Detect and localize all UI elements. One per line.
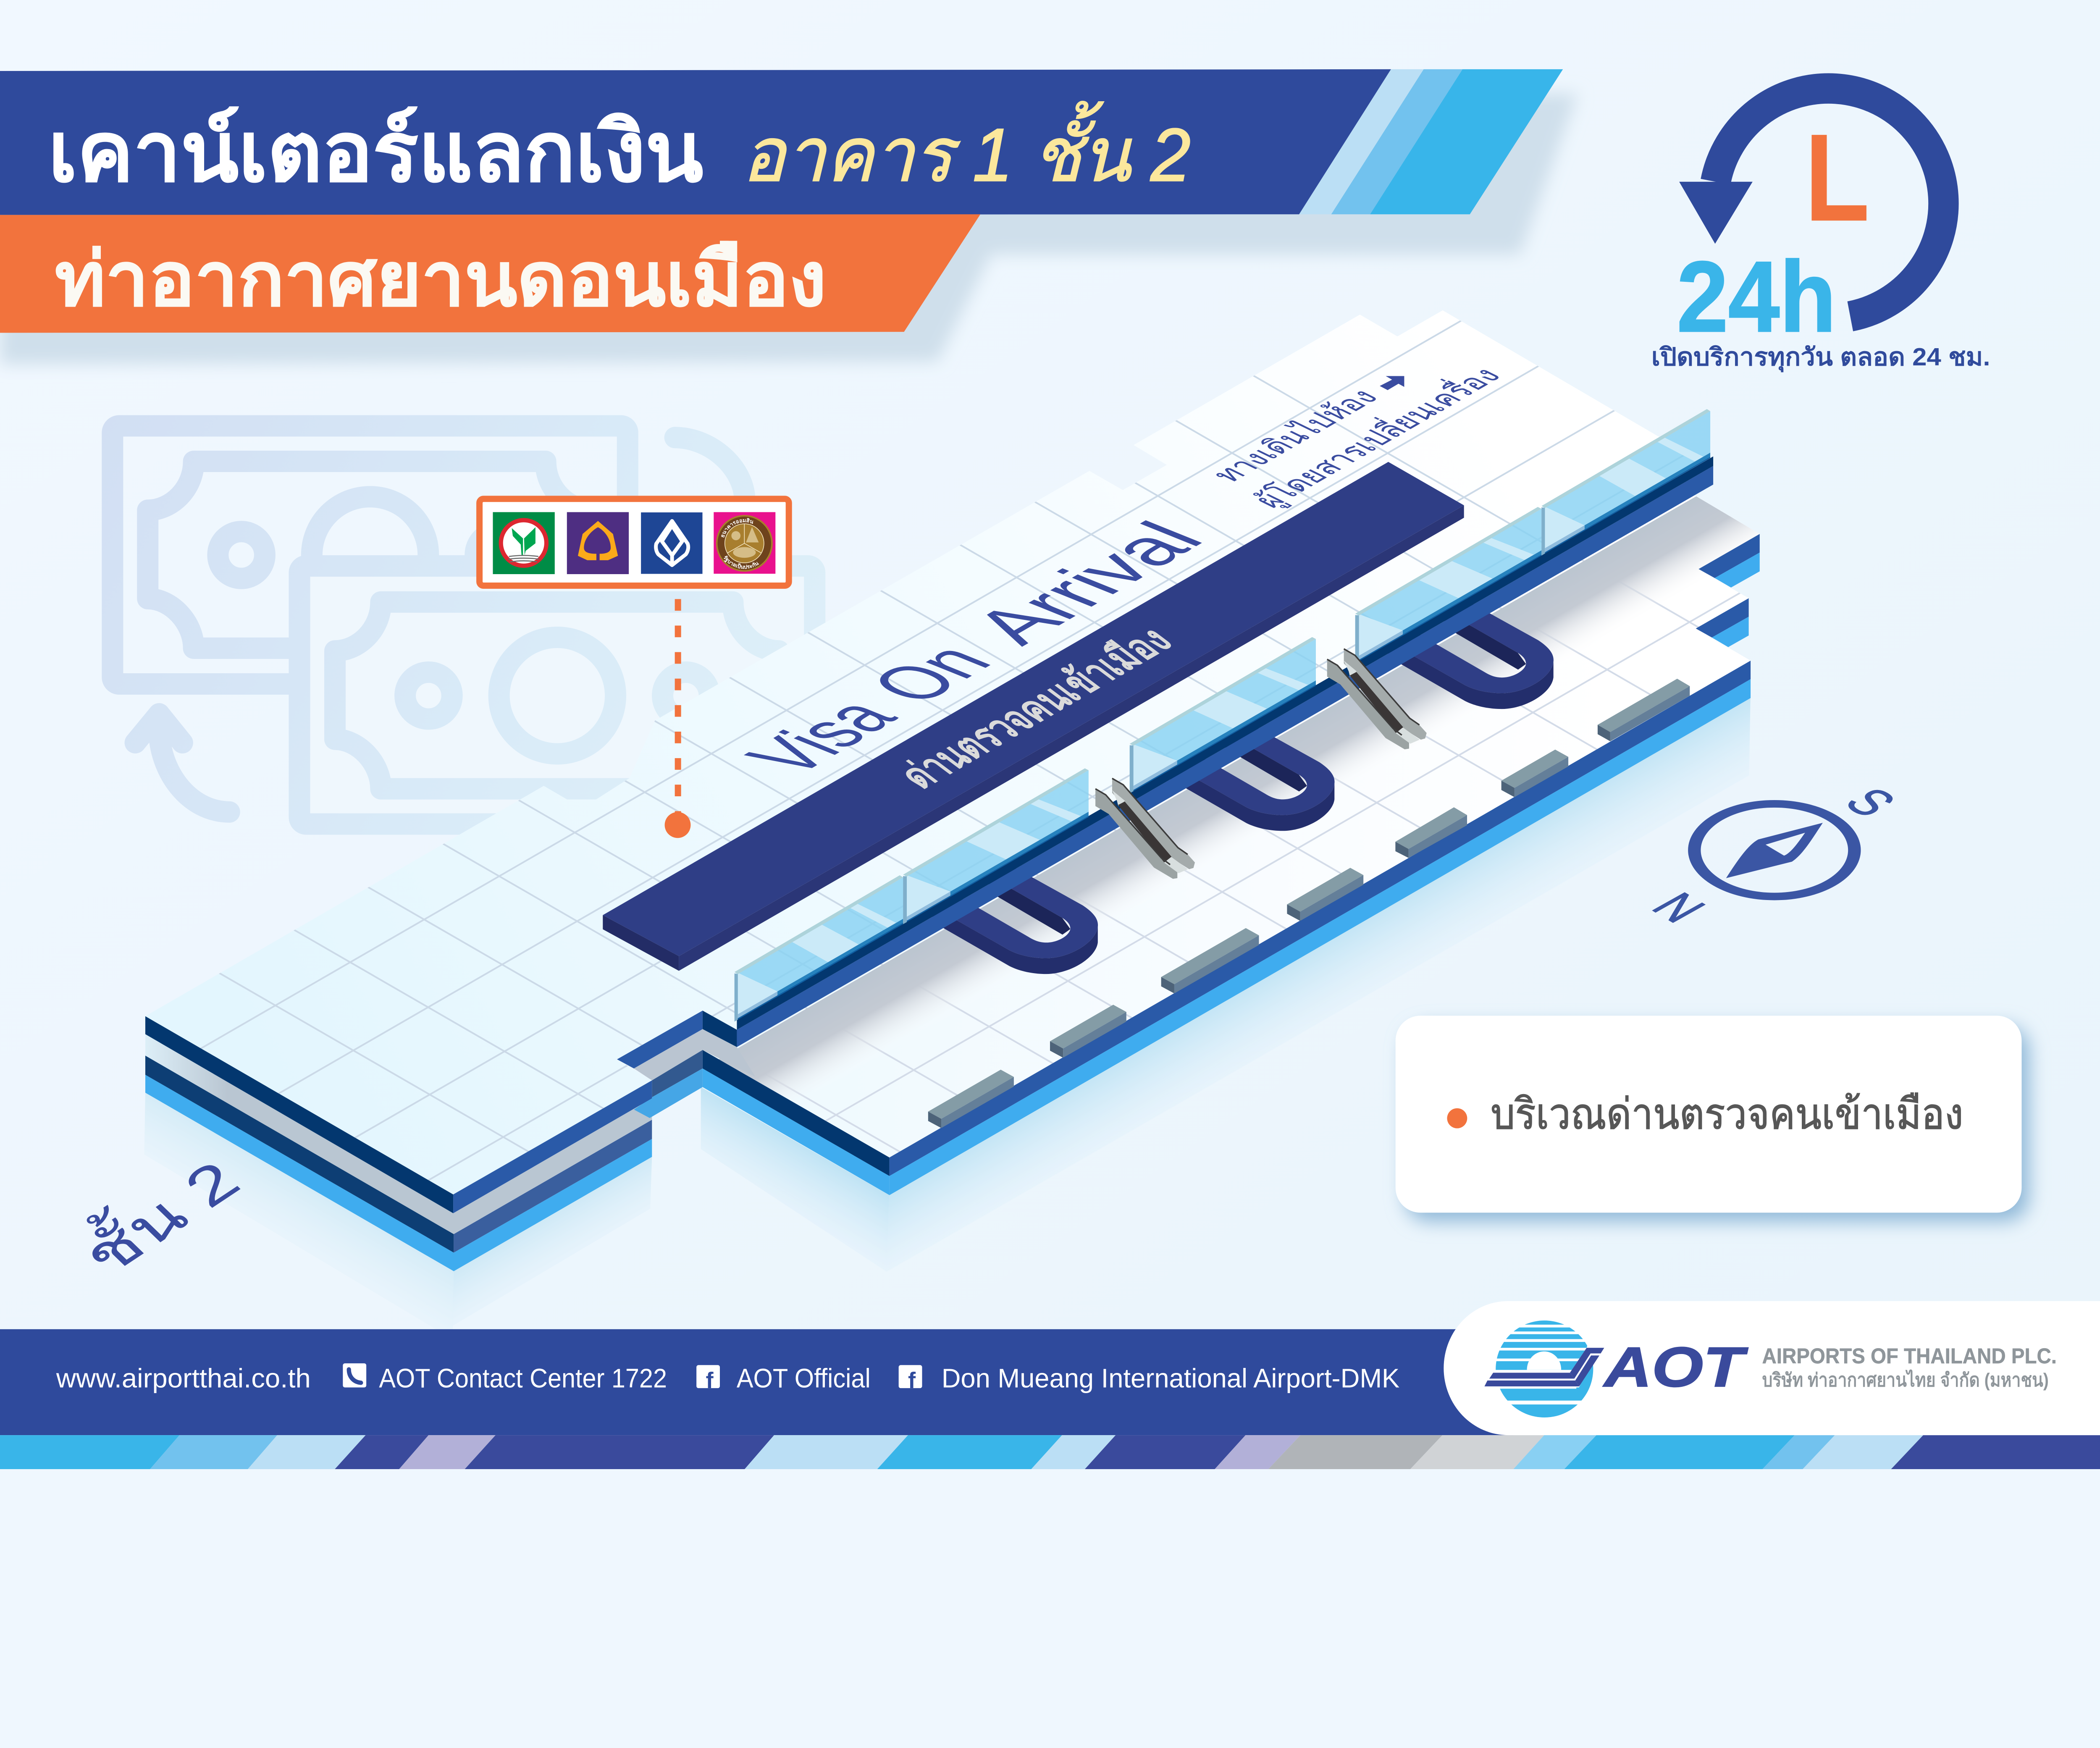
arrow: walkway direction (1380, 376, 1404, 390)
right lower floor plate (702, 496, 1760, 1195)
icon: 24 hour clock: 24h (1677, 241, 1836, 353)
footer bar (0, 1329, 1513, 1435)
counter label: ด่านตรวจคนเข้าเมือง (888, 619, 1182, 796)
footer website: www.airportthai.co.th (56, 1363, 311, 1394)
floor label: Visa On Arrival: Visa (727, 690, 916, 783)
escalator 2 (1327, 649, 1427, 749)
legend card: บริเวณด่านตรวจคนเข้าเมือง (1491, 1090, 1964, 1138)
floor label: Visa On Arrival: Arrival (952, 512, 1223, 654)
bank logos panel: ธนาคารออมสิน (719, 517, 754, 538)
bank logos panel: รัฐบาลเป็นประกัน (722, 554, 760, 570)
footer Don Mueang page: Don Mueang International Airport-DMK (942, 1363, 1399, 1394)
immigration counter block (603, 462, 1464, 971)
glass panel 3a (1355, 505, 1541, 663)
AOT company name Thai: บริษัท ท่าอากาศยานไทย จำกัด (มหาชน) (1762, 1369, 2049, 1391)
escalator 1 (1095, 778, 1195, 879)
location marker: dashed line and dot (665, 599, 690, 838)
legend card shadow (1405, 1026, 2029, 1221)
glass panel 1b (903, 766, 1089, 924)
AOT logo: AOT (1603, 1336, 1748, 1399)
icon: facebook (696, 1365, 720, 1393)
footer AOT Official: AOT Official (737, 1363, 871, 1394)
upper deck edge bands (145, 457, 1713, 1213)
icon: facebook: f (706, 1368, 714, 1393)
U-shaped ramp 3 (1388, 599, 1554, 709)
AOT company name: AIRPORTS OF THAILAND PLC. (1762, 1344, 2057, 1368)
glass panel 3b (1541, 407, 1710, 556)
icon: phone (343, 1363, 366, 1388)
floor label: walkway line 2: ผู้โดยสารเปลี่ยนเครื่อง (1242, 361, 1509, 513)
floor reflections (144, 698, 1751, 1339)
logo pill (1444, 1301, 2100, 1435)
floor label: level 2: ชั้น 2 (63, 1144, 252, 1286)
floor label: walkway line 1: ทางเดินไปห้อง (1204, 385, 1386, 487)
icon: facebook 2 (899, 1365, 922, 1393)
U-shaped ramp 1 (932, 864, 1098, 974)
footer stripes (0, 1435, 2100, 1469)
notch connector (634, 1029, 755, 1118)
floor label: Visa On Arrival: On (850, 635, 1011, 712)
upper floor deck with grid (145, 310, 1703, 1189)
title text: เคาน์เตอร์แลกเงิน (48, 105, 703, 198)
floor label: Visa On Arrival (727, 512, 1223, 783)
AOT logo (1480, 1320, 1748, 1417)
bank logos panel (480, 499, 789, 585)
footer contact center: AOT Contact Center 1722 (379, 1363, 667, 1394)
compass (1639, 781, 1908, 930)
benches along the floor edge (928, 679, 1690, 1128)
title shadow (0, 94, 1578, 364)
opening hours text: เปิดบริการทุกวัน ตลอด 24 ชม. (1651, 343, 1990, 373)
legend card (1396, 1016, 2021, 1213)
glass panel 1a (735, 873, 903, 1021)
glass panel 2 (1130, 635, 1316, 793)
subtitle text: ท่าอากาศยานดอนเมือง (55, 237, 826, 321)
background illustration: banknotes (113, 426, 815, 824)
icon: facebook 2: f (908, 1368, 916, 1393)
left lower floor slab (145, 1034, 652, 1271)
compass: S (1832, 781, 1908, 824)
icon: 24 hour clock (1677, 89, 1943, 353)
title bar: blue with stripes (0, 69, 1563, 215)
compass: N (1639, 885, 1718, 930)
subtitle bar (0, 214, 980, 333)
U-shaped ramp 2 (1169, 721, 1335, 831)
title location text: อาคาร 1 ชั้น 2 (742, 101, 1191, 197)
